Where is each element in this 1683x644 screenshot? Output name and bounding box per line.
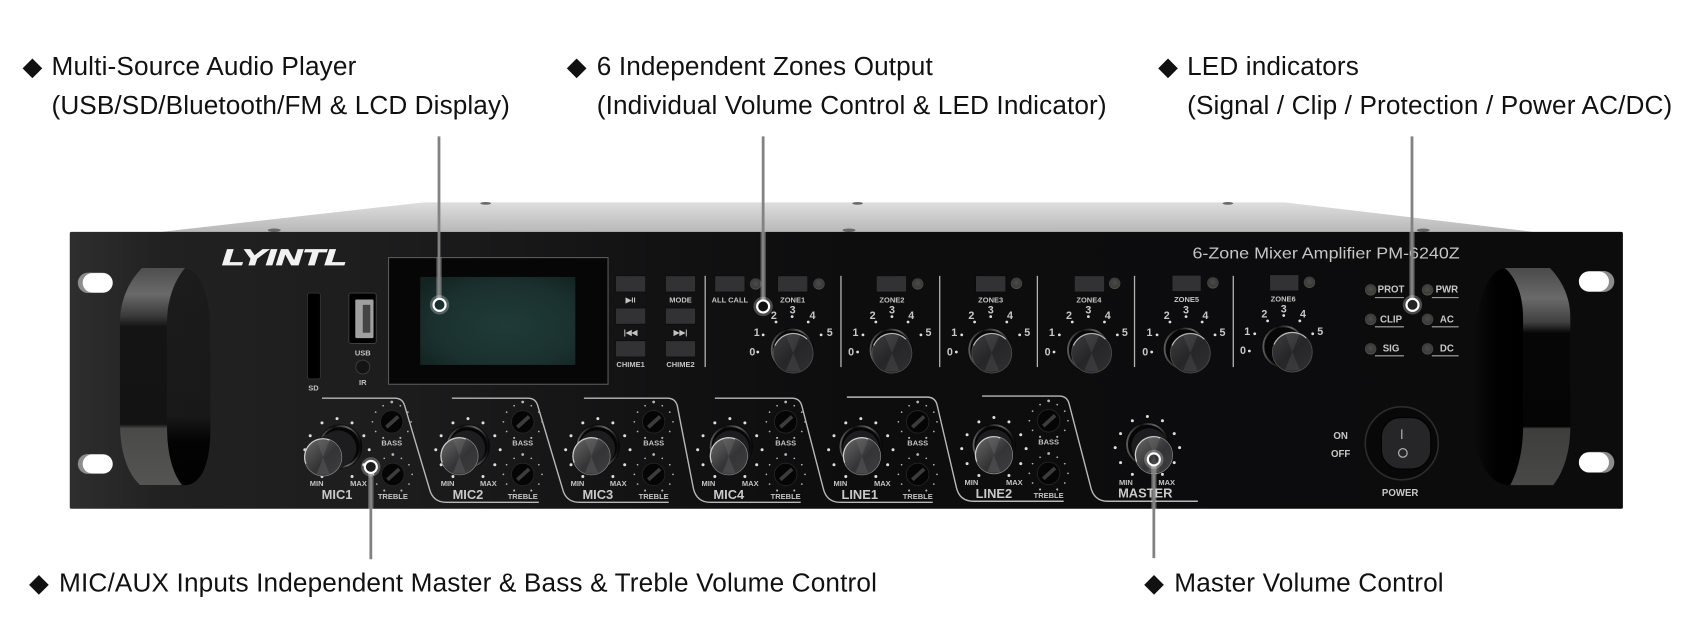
zone 2 control: 5: [925, 327, 931, 339]
transport buttons: CHIME2: [666, 360, 695, 369]
MIC3 channel: MIC3: [582, 487, 613, 502]
callout 1: audio player: Multi-Source Audio Player: [52, 51, 357, 81]
MASTER channel: [1114, 415, 1181, 500]
LINE1 channel: MIN: [834, 479, 847, 488]
MIC2 channel: TREBLE: [508, 492, 538, 501]
chassis top lid: [161, 202, 1533, 232]
USB port: USB: [355, 348, 371, 357]
MIC2 channel: BASS: [512, 438, 533, 447]
LCD display: [389, 258, 608, 384]
zone 5 control: 3: [1183, 304, 1189, 316]
IR sensor: [356, 360, 370, 387]
LINE2 channel: BASS: [1038, 437, 1059, 446]
MIC1 channel: MIN: [310, 479, 324, 488]
callout 2: zones: ◆: [567, 52, 587, 82]
LINE1 channel: BASS: [907, 438, 928, 447]
status LEDs: AC: [1440, 315, 1454, 326]
MIC2 channel: MAX: [480, 479, 497, 488]
transport buttons: ▶II: [625, 296, 636, 305]
zone 1 control: 1: [754, 327, 760, 339]
zone 4 control: ZONE4: [1076, 296, 1102, 305]
status LEDs: SIG: [1383, 344, 1399, 355]
USB port: [349, 293, 376, 357]
front panel: [70, 232, 1623, 509]
callout 2: zones: [567, 51, 1107, 120]
status LEDs: PWR: [1436, 284, 1458, 295]
zone 1 control: 0: [749, 346, 755, 358]
MIC2 channel: [434, 401, 543, 502]
all call button: [712, 276, 761, 305]
zone 6 control: 3: [1281, 303, 1287, 315]
zone 3 control: ZONE3: [978, 296, 1003, 305]
transport buttons: CHIME1: [616, 360, 645, 369]
MIC1 channel: [303, 401, 413, 502]
LINE2 channel: MIN: [964, 478, 978, 487]
status LEDs: DC: [1440, 344, 1454, 355]
callout 4 leader: [363, 459, 378, 559]
zone 2 control: [848, 276, 931, 373]
callout 2 leader: [756, 136, 771, 314]
MIC1 channel: TREBLE: [378, 492, 408, 501]
MIC3 channel: BASS: [643, 438, 664, 447]
zone 5 control: [1142, 275, 1226, 373]
callout 1 leader: [432, 136, 447, 312]
zone 4 control: 5: [1122, 327, 1128, 339]
MIC1 channel: BASS: [381, 438, 402, 447]
MIC3 channel: [564, 401, 674, 502]
status LEDs: CLIP: [1380, 315, 1403, 326]
zone 5 control: 0: [1142, 346, 1148, 358]
zone 4 control: 4: [1105, 310, 1111, 322]
zone 2 control: 0: [848, 346, 854, 358]
zone 2 control: 3: [889, 304, 895, 316]
zone 6 control: 2: [1261, 309, 1267, 321]
zone 4 control: [1045, 276, 1128, 373]
zone 5 control: 5: [1220, 327, 1226, 339]
callout 3 leader: [1405, 136, 1420, 312]
MIC2 channel: MIC2: [453, 487, 483, 502]
zone 1 control: ZONE1: [780, 296, 805, 305]
transport buttons: |◀◀: [624, 328, 639, 337]
zone 1 control: [749, 276, 833, 373]
callout 1: audio player: (USB/SD/Bluetooth/FM & LCD Display): [52, 90, 510, 120]
MIC4 channel: BASS: [775, 438, 796, 447]
zone 1 control: 2: [771, 310, 777, 322]
LINE1 channel: TREBLE: [903, 492, 933, 501]
zone 5 control: 4: [1202, 310, 1208, 322]
right handle: [1473, 268, 1570, 485]
zone dividers: [705, 276, 1233, 367]
input strip outlines: [322, 396, 1198, 502]
zone 4 control: 0: [1045, 346, 1051, 358]
MIC4 channel: [696, 401, 806, 502]
callout 3: LED indicators: ◆: [1158, 52, 1178, 82]
callout 4: inputs: MIC/AUX Inputs Independent Master & Bass & Treble Volume Control: [59, 567, 877, 597]
zone 3 control: 3: [988, 304, 994, 316]
callout 4: inputs: ◆: [29, 568, 49, 598]
zone 3 control: 5: [1024, 327, 1030, 339]
zone 3 control: 2: [968, 310, 974, 322]
transport buttons: [616, 276, 696, 369]
zone 6 control: 5: [1317, 326, 1323, 338]
zone 1 control: 4: [810, 310, 816, 322]
transport buttons: MODE: [669, 296, 692, 305]
all call button: ALL CALL: [712, 296, 749, 305]
IR sensor: IR: [359, 378, 367, 387]
zone 3 control: [947, 276, 1030, 373]
power switch: POWER: [1382, 488, 1418, 499]
power switch: OFF: [1331, 449, 1350, 460]
MIC2 channel: MIN: [441, 479, 454, 488]
MIC4 channel: MIN: [702, 479, 715, 488]
zone 5 control: ZONE5: [1174, 295, 1199, 304]
zone 3 control: 0: [947, 346, 953, 358]
SD slot: [308, 293, 320, 393]
zone 2 control: 1: [852, 327, 858, 339]
callout 2: zones: 6 Independent Zones Output: [597, 51, 933, 81]
brand logo: LYINTL: [222, 245, 347, 270]
zone 2 control: ZONE2: [879, 296, 904, 305]
zone 6 control: 1: [1244, 326, 1250, 338]
model title: 6-Zone Mixer Amplifier PM-6240Z: [1192, 246, 1460, 263]
callout 1: audio player: [23, 51, 510, 120]
LINE2 channel: LINE2: [976, 486, 1012, 501]
amplifier device: [70, 202, 1623, 509]
callout 2: zones: (Individual Volume Control & LED Indicator): [597, 90, 1107, 120]
MIC1 channel: MIC1: [322, 487, 352, 502]
zone 5 control: 1: [1147, 327, 1153, 339]
MIC3 channel: MIN: [571, 479, 584, 488]
zone 6 control: 0: [1240, 345, 1246, 357]
zone 6 control: [1240, 275, 1323, 372]
status LEDs: PROT: [1378, 284, 1405, 295]
zone 3 control: 1: [951, 327, 957, 339]
power switch: [1331, 407, 1438, 499]
transport buttons: ▶▶|: [673, 328, 687, 337]
zone 2 control: 4: [908, 310, 914, 322]
LINE1 channel: MAX: [874, 479, 891, 488]
callout 3: LED indicators: LED indicators: [1187, 51, 1359, 81]
LINE2 channel: MAX: [1006, 478, 1023, 487]
MIC4 channel: MAX: [742, 479, 759, 488]
mounting holes: [78, 271, 1614, 474]
LINE1 channel: LINE1: [841, 487, 878, 502]
callout 5: master volume: Master Volume Control: [1174, 567, 1444, 597]
zone 4 control: 3: [1085, 304, 1091, 316]
callout 3: LED indicators: (Signal / Clip / Protection / Power AC/DC): [1187, 90, 1672, 120]
LINE2 channel: [960, 399, 1069, 501]
zone 3 control: 4: [1007, 310, 1013, 322]
callout 1: audio player: ◆: [23, 52, 43, 82]
zone 1 control: 3: [790, 304, 796, 316]
zone 6 control: ZONE6: [1271, 295, 1296, 304]
left handle: [120, 268, 210, 485]
MASTER channel: MASTER: [1118, 485, 1173, 500]
callout 5: master volume: ◆: [1144, 568, 1164, 598]
LINE2 channel: TREBLE: [1034, 491, 1064, 500]
MIC4 channel: MIC4: [713, 487, 745, 502]
MIC1 channel: MAX: [350, 479, 367, 488]
zone 2 control: 2: [870, 310, 876, 322]
callout 5 leader: [1146, 452, 1161, 558]
MASTER channel: MIN: [1119, 478, 1133, 487]
MIC3 channel: TREBLE: [639, 492, 669, 501]
zone 6 control: 4: [1300, 309, 1306, 321]
LINE1 channel: [827, 401, 938, 502]
MASTER channel: MAX: [1158, 478, 1175, 487]
zone 5 control: 2: [1164, 310, 1170, 322]
SD slot: SD: [308, 384, 319, 393]
zone 1 control: 5: [827, 327, 833, 339]
zone 4 control: 1: [1049, 327, 1055, 339]
zone 4 control: 2: [1066, 310, 1072, 322]
MIC4 channel: TREBLE: [771, 492, 801, 501]
callout 3: LED indicators: [1158, 51, 1672, 120]
MIC3 channel: MAX: [610, 479, 627, 488]
status LEDs: [1365, 284, 1459, 356]
power switch: ON: [1333, 431, 1348, 442]
